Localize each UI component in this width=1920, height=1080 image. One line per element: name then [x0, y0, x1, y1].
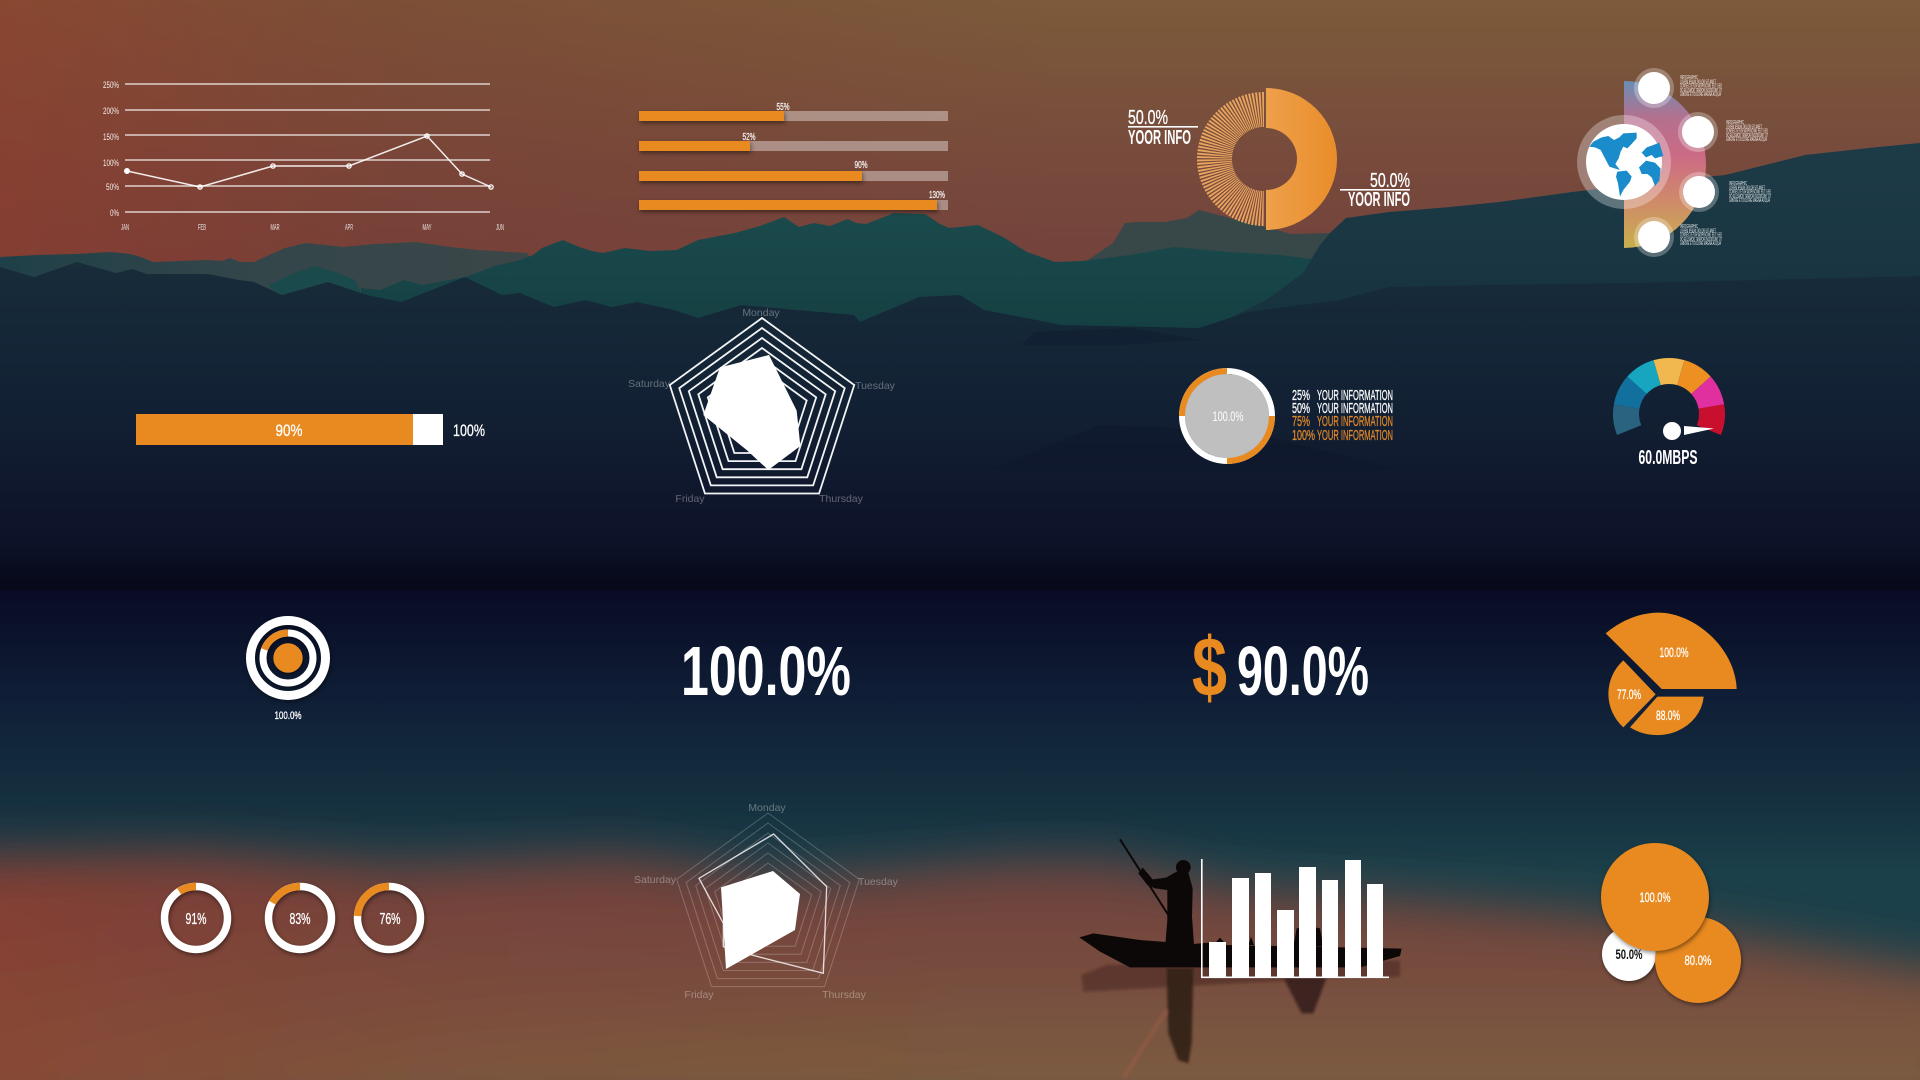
- label: left: [1128, 107, 1198, 149]
- axis labels: [634, 802, 899, 1001]
- ring legend: YOUR INFORMATION: [1317, 427, 1393, 444]
- month labels: [121, 222, 504, 232]
- ring legend: 75%: [1292, 413, 1310, 430]
- horizontal progress bars: [639, 102, 948, 210]
- ring legend: YOUR INFORMATION: [1317, 387, 1393, 404]
- text: JUN: [496, 222, 504, 232]
- radar chart: filled: [628, 307, 896, 505]
- big stat: 100.0%: 100.0%: [681, 632, 851, 710]
- big stat: $ 90.0%: [1192, 620, 1369, 714]
- needle: [1663, 422, 1714, 440]
- month labels: APR: [345, 222, 353, 232]
- node captions: CONSECTETUR ADIPISCING ELIT SED: [1680, 232, 1722, 238]
- big stat: $ 90.0%: 90.0%: [1237, 632, 1369, 710]
- axis labels: Friday: [675, 493, 705, 505]
- bubble: 80.0%: [1655, 917, 1741, 1003]
- node captions: [1680, 75, 1771, 247]
- nodes: [1634, 68, 1719, 257]
- text: CONSECTETUR ADIPISCING ELIT SED: [1726, 128, 1768, 134]
- axis labels: Tuesday: [858, 876, 899, 888]
- label: right: YOOR INFO: [1348, 189, 1410, 211]
- label: right: 50.0%: [1370, 170, 1410, 192]
- donut: 76%: [356, 885, 422, 951]
- node captions: LABORE ET DOLORE MAGNA ALIQUA: [1680, 241, 1721, 247]
- big progress bar: 100%: [453, 421, 485, 440]
- target gauge: 100.0%: [274, 710, 302, 722]
- axis labels: Monday: [748, 802, 786, 814]
- month labels: MAR: [270, 222, 280, 232]
- ring legend: YOUR INFORMATION: [1317, 413, 1393, 430]
- axis labels: Tuesday: [855, 380, 896, 392]
- exploded pie chart: 88.0%: [1656, 708, 1680, 723]
- donut: 83%: 83%: [290, 911, 310, 928]
- line chart: [103, 80, 504, 232]
- axis labels: Thursday: [822, 989, 867, 1001]
- node captions: LOREM IPSUM DOLOR SIT AMET: [1726, 124, 1762, 130]
- bubble: 50.0%: [1602, 927, 1656, 981]
- horizontal progress bars: 90%: [854, 160, 868, 171]
- boat silhouette with reflection: [1079, 839, 1402, 1078]
- bubble: 100.0%: [1601, 843, 1709, 951]
- bubble chart: [1601, 843, 1741, 1003]
- node captions: LABORE ET DOLORE MAGNA ALIQUA: [1680, 92, 1721, 98]
- node captions: LABORE ET DOLORE MAGNA ALIQUA: [1726, 137, 1767, 143]
- text: LABORE ET DOLORE MAGNA ALIQUA: [1729, 198, 1770, 204]
- node captions: DO ELUSMOD TEMPOR INCIDIDUNT UT: [1680, 237, 1722, 243]
- node captions: INFOGRAPHIC: [1726, 120, 1744, 126]
- horizontal progress bars: 52%: [742, 132, 756, 143]
- target gauge: [250, 620, 326, 722]
- label: left: 50.0%: [1128, 107, 1168, 129]
- bubble: 100.0%: 100.0%: [1640, 889, 1670, 905]
- y axis labels: 250%: [103, 80, 119, 91]
- segmented ring: 100.0%: 100.0%: [1212, 408, 1244, 424]
- label: right: [1340, 170, 1410, 211]
- text: CONSECTETUR ADIPISCING ELIT SED: [1729, 190, 1771, 196]
- month labels: JAN: [121, 222, 129, 232]
- radar chart: outline: [634, 802, 899, 1001]
- node captions: LOREM IPSUM DOLOR SIT AMET: [1680, 228, 1716, 234]
- speed gauge: 60.0MBPS: [1638, 447, 1698, 469]
- y axis labels: 100%: [103, 158, 119, 169]
- axis labels: Saturday: [634, 874, 677, 886]
- axis labels: Thursday: [819, 493, 864, 505]
- y axis labels: 200%: [103, 106, 119, 117]
- y axis labels: 50%: [106, 182, 119, 193]
- bubble: 50.0%: 50.0%: [1616, 946, 1643, 962]
- exploded pie chart: 100.0%: [1660, 645, 1688, 660]
- exploded pie chart: 77.0%: [1617, 687, 1641, 702]
- node captions: CONSECTETUR ADIPISCING ELIT SED: [1680, 84, 1722, 90]
- data line: [125, 134, 493, 189]
- node captions: LOREM IPSUM DOLOR SIT AMET: [1680, 80, 1716, 86]
- node captions: DO ELUSMOD TEMPOR INCIDIDUNT UT: [1680, 88, 1722, 94]
- y axis labels: [103, 80, 119, 219]
- icon: globe: [1577, 115, 1671, 209]
- horizontal progress bars: 130%: [929, 190, 945, 201]
- globe infographic: [1577, 68, 1771, 257]
- segmented ring: 100.0%: [1182, 371, 1272, 461]
- big progress bar: [136, 414, 485, 445]
- ring legend: [1292, 387, 1393, 444]
- node captions: LOREM IPSUM DOLOR SIT AMET: [1729, 186, 1765, 192]
- node captions: INFOGRAPHIC: [1680, 75, 1698, 81]
- text: DO ELUSMOD TEMPOR INCIDIDUNT UT: [1726, 133, 1768, 139]
- donut: 83%: [257, 875, 343, 961]
- axis labels: [628, 307, 896, 505]
- node captions: INFOGRAPHIC: [1680, 224, 1698, 230]
- half donut chart: [1128, 88, 1410, 230]
- label: left: YOOR INFO: [1128, 127, 1191, 149]
- donut trio: [153, 875, 422, 961]
- y axis labels: 150%: [103, 132, 119, 143]
- big progress bar: 90%: [276, 421, 302, 440]
- speed gauge: [1608, 353, 1730, 475]
- ring legend: YOUR INFORMATION: [1317, 400, 1393, 417]
- axis labels: Friday: [684, 989, 714, 1001]
- horizontal progress bars: 55%: [776, 102, 790, 113]
- month labels: FEB: [198, 222, 206, 232]
- donut: 91%: [153, 875, 239, 961]
- column chart: [1201, 859, 1389, 978]
- donut: 76%: 76%: [380, 911, 400, 928]
- ring legend: 25%: [1292, 387, 1310, 404]
- node captions: INFOGRAPHIC: [1729, 181, 1747, 187]
- ring legend: 100%: [1292, 427, 1315, 444]
- ring legend: 50%: [1292, 400, 1310, 417]
- bubble: 80.0%: 80.0%: [1684, 952, 1712, 968]
- month labels: MAY: [422, 222, 432, 232]
- exploded pie chart: [1606, 613, 1737, 735]
- donut: 91%: 91%: [186, 911, 206, 928]
- axis labels: Monday: [742, 307, 780, 319]
- axis labels: Saturday: [628, 378, 671, 390]
- big stat: $ 90.0%: $: [1192, 620, 1227, 714]
- text: DO ELUSMOD TEMPOR INCIDIDUNT UT: [1729, 194, 1771, 200]
- y axis labels: 0%: [110, 208, 119, 219]
